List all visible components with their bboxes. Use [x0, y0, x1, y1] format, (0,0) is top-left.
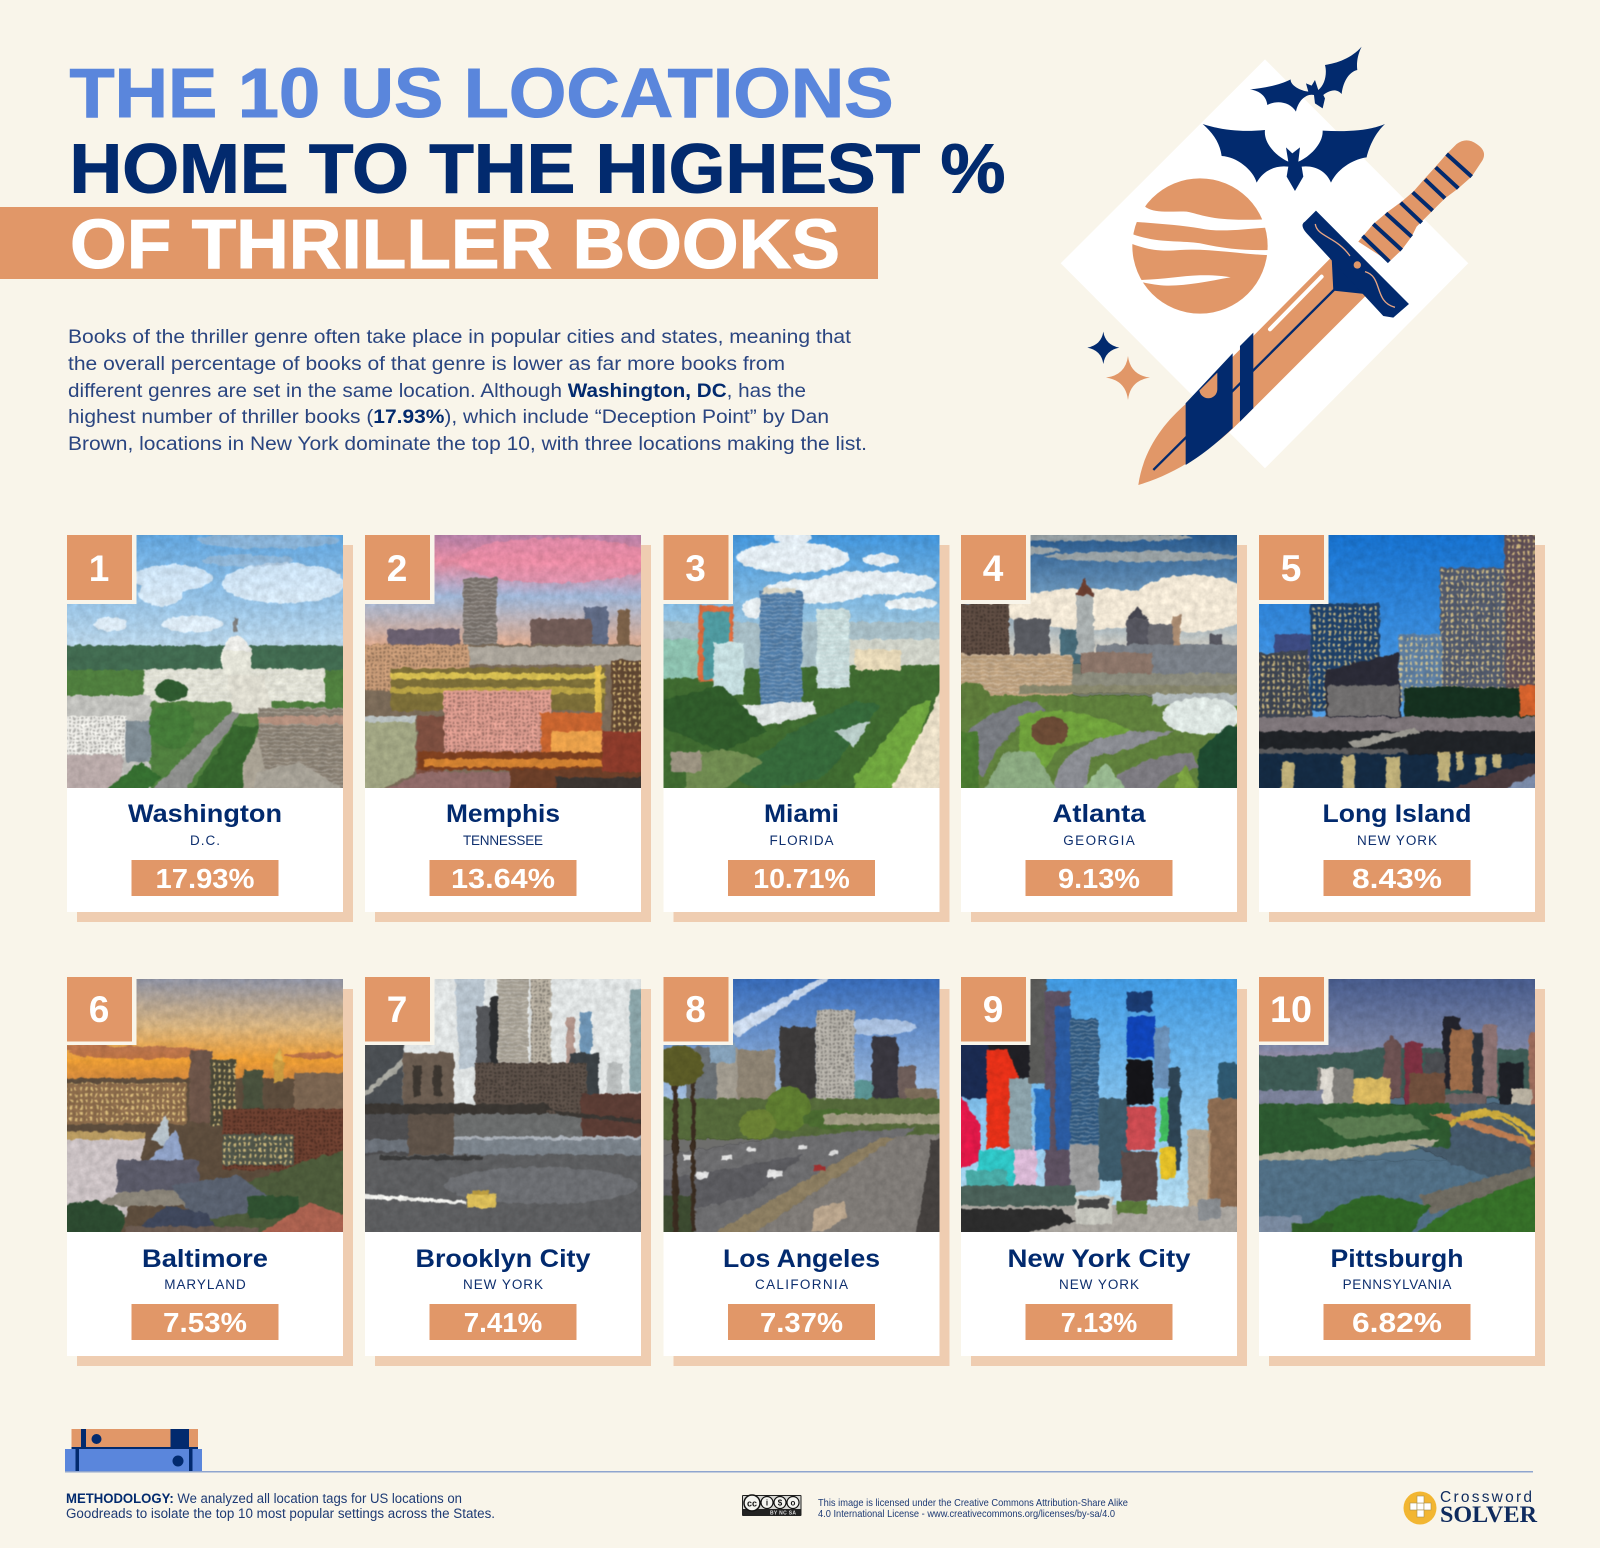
rank badge: 10: [1270, 989, 1312, 1030]
photo: Washington: [67, 535, 343, 788]
percentage: 7.37%: [760, 1307, 843, 1338]
panel: card 10 Pittsburgh: [1256, 976, 1545, 1366]
methodology: Goodreads to isolate the top 10 most popular settings across the States.: [66, 1506, 495, 1521]
title band: [0, 207, 878, 279]
icon: creative commons badge: [742, 1495, 802, 1516]
city name: Atlanta: [1052, 800, 1147, 828]
percentage: 7.13%: [1061, 1307, 1137, 1338]
title: [0, 54, 1005, 283]
percentage: 17.93%: [156, 863, 255, 894]
icon: planet: [1128, 178, 1270, 314]
logo: Crossword Solver: [1404, 1489, 1537, 1527]
license text: This image is licensed under the Creative Commons Attribution-Share Alike: [818, 1497, 1128, 1509]
license text: [818, 1497, 1128, 1520]
state: FLORIDA: [770, 833, 834, 848]
state: GEORGIA: [1063, 833, 1135, 848]
city name: Memphis: [446, 800, 560, 828]
percentage: [1026, 1304, 1172, 1340]
rank badge: [1259, 977, 1328, 1045]
percentage: 9.13%: [1058, 863, 1140, 894]
rank badge: [961, 977, 1030, 1045]
city name: Pittsburgh: [1330, 1245, 1464, 1273]
photo: Memphis: [365, 535, 641, 788]
percentage: [728, 1304, 875, 1340]
city name: Los Angeles: [723, 1245, 880, 1273]
logo: Crossword Solver: SOLVER: [1440, 1502, 1537, 1527]
rank badge: 2: [387, 548, 407, 589]
city name: Miami: [764, 800, 839, 828]
intro paragraph: Books of the thriller genre often take place in popular cities and states, meaning that: [68, 327, 852, 348]
percentage: 7.53%: [163, 1307, 247, 1338]
title line 1: THE 10 US LOCATIONS: [70, 54, 894, 132]
state: NEW YORK: [1357, 833, 1437, 848]
percentage: [132, 860, 278, 896]
icon: creative commons badge: i: [766, 1498, 768, 1508]
panel: card 3 Miami: [660, 532, 950, 922]
icon: creative commons badge: o: [791, 1498, 796, 1508]
rank badge: 6: [89, 989, 109, 1030]
icon: creative commons badge: cc: [747, 1498, 757, 1508]
percentage: [430, 1304, 576, 1340]
intro paragraph: highest number of thriller books ( 17.93% ), which include “Deception Point” by Dan: [68, 407, 829, 428]
photo: Baltimore: [67, 979, 343, 1232]
illustration: dagger, planet and bats: [1061, 47, 1484, 485]
percentage: [1324, 1304, 1470, 1340]
icon: creative commons badge: BY NC SA: [770, 1510, 796, 1516]
title line 2: HOME TO THE HIGHEST %: [70, 130, 1005, 208]
percentage: [430, 860, 576, 896]
panel: card 8 Los Angeles: [654, 976, 950, 1366]
state: CALIFORNIA: [755, 1277, 848, 1292]
rank badge: 4: [983, 548, 1004, 589]
percentage: 6.82%: [1352, 1307, 1442, 1338]
photo: Pittsburgh: [1259, 979, 1535, 1232]
state: NEW YORK: [463, 1277, 543, 1292]
photo: Brooklyn City: [365, 979, 641, 1232]
percentage: 7.41%: [464, 1307, 542, 1338]
panel: card 7 Brooklyn City: [362, 976, 651, 1366]
icon: dagger: [1138, 140, 1484, 485]
icon: navy star: [1087, 332, 1119, 364]
panel: card 5 Long Island: [1256, 532, 1545, 922]
rank badge: [961, 535, 1030, 604]
photo: Los Angeles: [664, 979, 940, 1232]
license text: 4.0 International License - www.creativecommons.org/licenses/by-sa/4.0: [818, 1508, 1115, 1520]
state: MARYLAND: [164, 1277, 246, 1292]
percentage: [728, 860, 875, 896]
white diamond: [1061, 59, 1468, 468]
rank badge: [664, 977, 733, 1045]
photo: New York City: [961, 979, 1237, 1232]
rank badge: 3: [685, 548, 706, 589]
icon: creative commons badge: $: [778, 1498, 783, 1508]
percentage: [1026, 860, 1172, 896]
percentage: [132, 1304, 278, 1340]
intro paragraph: [68, 327, 867, 455]
intro paragraph: the overall percentage of books of that genre is lower as far more books from: [68, 354, 785, 375]
photo: Long Island: [1259, 535, 1535, 788]
methodology: METHODOLOGY: We analyzed all location tags for US locations on: [66, 1491, 462, 1506]
icon: small bat: [1250, 47, 1362, 112]
panel: card 6 Baltimore: [54, 976, 353, 1366]
percentage: 10.71%: [753, 863, 850, 894]
rank badge: [664, 535, 733, 604]
logo: Crossword Solver: Crossword: [1440, 1489, 1532, 1506]
icon: large bat: [1203, 124, 1385, 191]
percentage: [1324, 860, 1470, 896]
city name: Long Island: [1322, 800, 1472, 828]
title line 3: OF THRILLER BOOKS: [70, 205, 840, 283]
icon: stacked books: [65, 1429, 202, 1471]
photo: Miami: [664, 535, 940, 788]
rank badge: 8: [685, 989, 706, 1030]
city name: Washington: [128, 800, 282, 828]
rank badge: [365, 977, 434, 1045]
rank badge: 7: [387, 989, 407, 1030]
rank badge: 1: [89, 548, 109, 589]
percentage: 13.64%: [451, 863, 555, 894]
state: TENNESSEE: [463, 833, 543, 848]
rank badge: 9: [983, 989, 1003, 1030]
photo: Atlanta: [961, 535, 1237, 788]
city name: New York City: [1008, 1245, 1191, 1273]
state: NEW YORK: [1059, 1277, 1139, 1292]
intro paragraph: different genres are set in the same location. Although Washington, DC , has the: [68, 381, 806, 402]
methodology: [66, 1491, 495, 1521]
panel: card 1 Washington: [64, 532, 353, 922]
rank badge: 5: [1281, 548, 1301, 589]
footer rule: [65, 1471, 1533, 1472]
rank badge: [67, 977, 136, 1045]
intro paragraph: Brown, locations in New York dominate the top 10, with three locations making the list.: [68, 434, 867, 455]
city name: Baltimore: [142, 1245, 268, 1273]
state: D.C.: [190, 833, 220, 848]
rank badge: [67, 535, 136, 604]
panel: card 9 New York City: [958, 976, 1247, 1366]
state: PENNSYLVANIA: [1343, 1277, 1451, 1292]
percentage: 8.43%: [1352, 863, 1442, 894]
panel: card 2 Memphis: [362, 532, 653, 922]
icon: orange star: [1106, 356, 1150, 400]
rank badge: [1259, 535, 1328, 604]
panel: card 4 Atlanta: [950, 532, 1254, 922]
city name: Brooklyn City: [416, 1245, 591, 1273]
rank badge: [365, 535, 434, 604]
